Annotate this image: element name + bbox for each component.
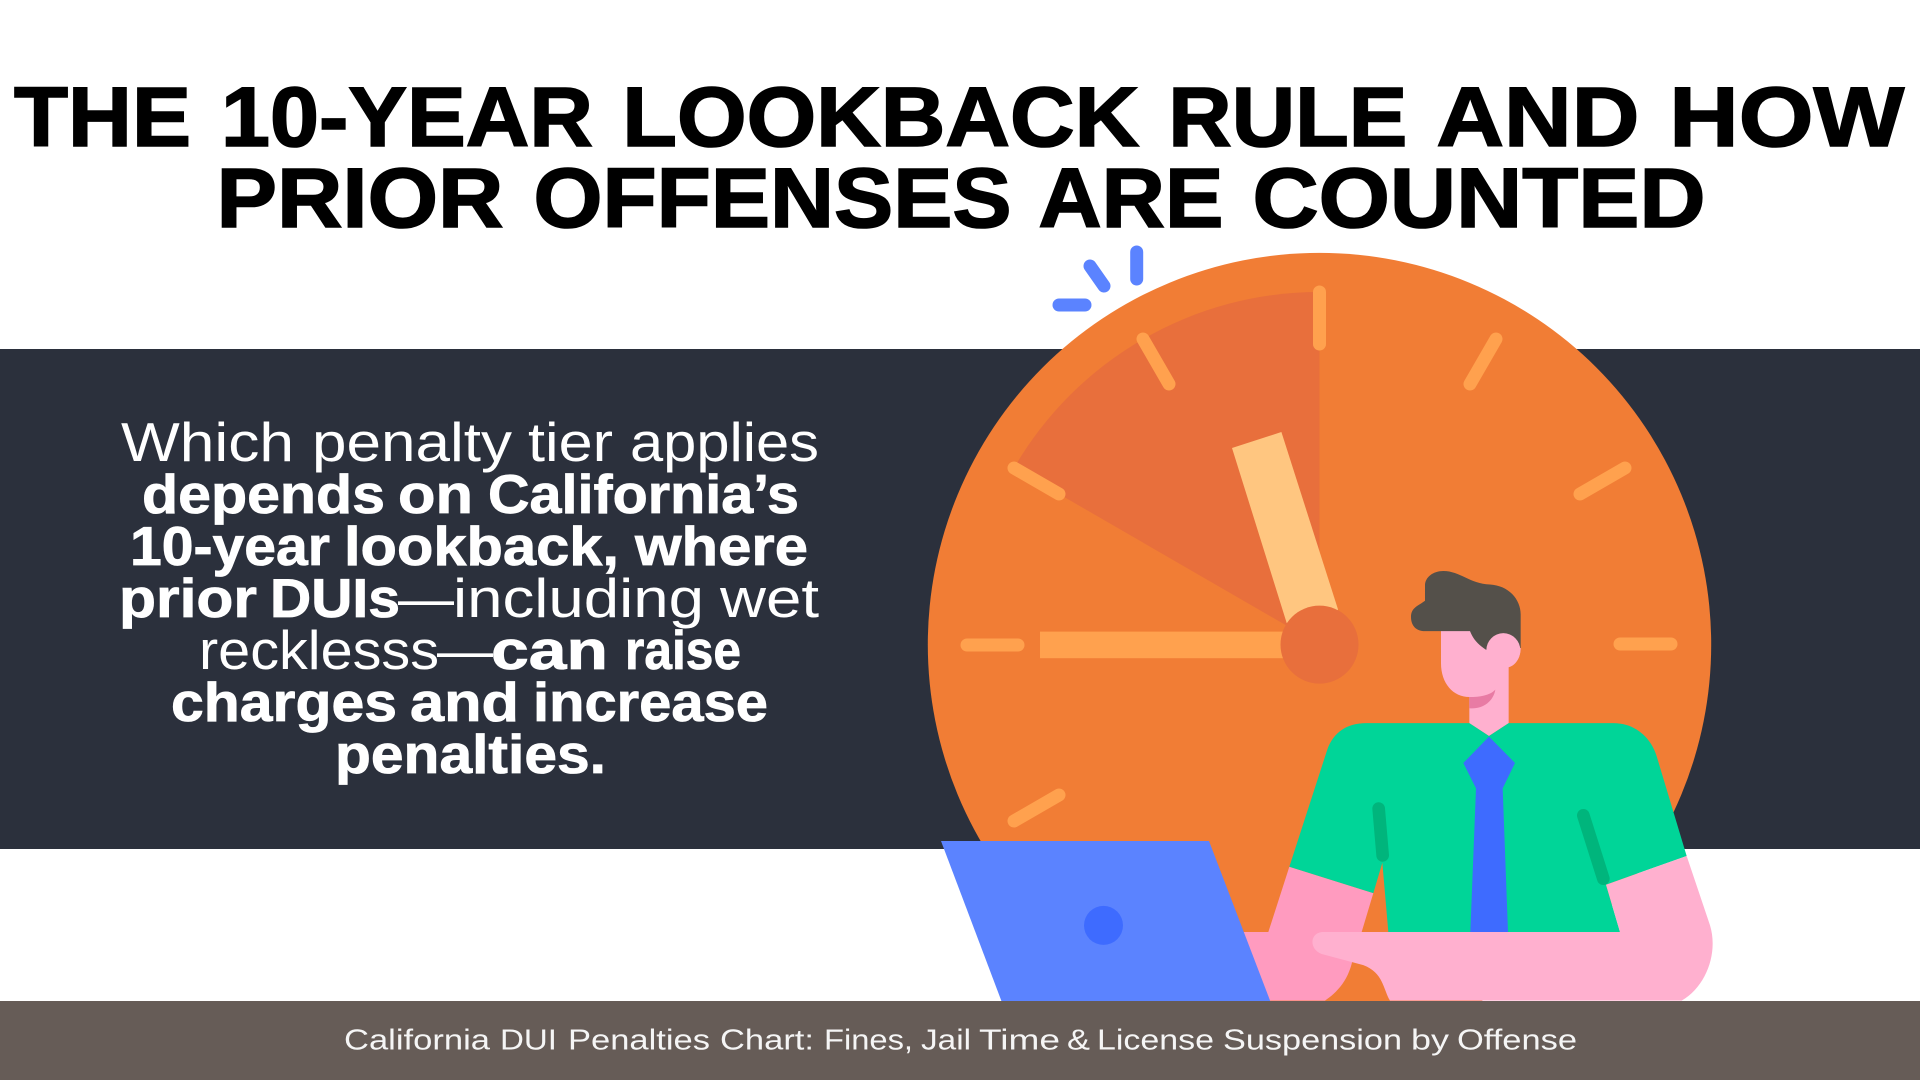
smile shadow — [1469, 690, 1495, 708]
title — [14, 70, 1905, 245]
footer caption — [344, 1024, 1577, 1056]
title: AND — [1436, 70, 1639, 164]
text block: lookback explanation: 10-year — [130, 515, 330, 577]
text block: lookback explanation: Which — [121, 411, 294, 473]
text block: lookback explanation: raise — [625, 619, 741, 681]
text block: lookback explanation: California’s — [488, 463, 799, 525]
text block: lookback explanation: penalties. — [335, 723, 606, 785]
footer caption: Offense — [1457, 1024, 1577, 1056]
text block: lookback explanation: recklesss — [199, 619, 439, 681]
text block: lookback explanation: charges — [171, 671, 397, 733]
text block: lookback explanation: — — [398, 567, 454, 629]
footer caption: Penalties — [568, 1024, 710, 1056]
shirt — [1289, 723, 1687, 932]
title: HOW — [1669, 70, 1905, 164]
footer caption: California — [344, 1024, 491, 1056]
text block: lookback explanation: tier — [528, 411, 613, 473]
text block: lookback explanation: depends — [142, 463, 385, 525]
text block: lookback explanation: prior — [119, 567, 257, 629]
clock tick marks — [967, 292, 1671, 821]
footer caption: License — [1097, 1024, 1214, 1056]
footer bar — [0, 1001, 1920, 1080]
text block: lookback explanation: including — [453, 567, 704, 629]
title: OFFENSES — [534, 151, 1012, 245]
text block: lookback explanation: DUIs — [270, 567, 400, 629]
footer caption: & — [1067, 1024, 1090, 1056]
footer caption: DUI — [500, 1024, 557, 1056]
footer caption: by — [1411, 1024, 1450, 1056]
tie — [1463, 737, 1515, 932]
text block: lookback explanation: applies — [630, 411, 819, 473]
title: LOOKBACK — [622, 70, 1139, 164]
footer caption: Suspension — [1223, 1024, 1402, 1056]
clock face — [928, 253, 1711, 1036]
footer caption: Fines, — [824, 1024, 913, 1056]
title: PRIOR — [216, 151, 504, 245]
title: COUNTED — [1252, 151, 1706, 245]
text block: lookback explanation: — — [437, 619, 493, 681]
left arm — [1237, 867, 1373, 1001]
right arm — [1312, 856, 1713, 1001]
text block: lookback explanation: and — [410, 671, 519, 733]
footer caption: Time — [979, 1024, 1060, 1056]
person at laptop — [1237, 571, 1713, 1001]
hour hand — [1232, 432, 1338, 650]
neck and face — [1441, 628, 1521, 736]
title: ARE — [1038, 151, 1223, 245]
text block: lookback explanation: penalty — [312, 411, 513, 473]
shirt creases — [1379, 809, 1603, 879]
title: 10-YEAR — [221, 70, 593, 164]
text block: lookback explanation: where — [634, 515, 808, 577]
footer caption: Chart: — [720, 1024, 814, 1056]
minute hand — [1040, 632, 1320, 658]
text block: lookback explanation: on — [398, 463, 473, 525]
dark band panel — [0, 349, 1920, 849]
footer caption: Jail — [921, 1024, 971, 1056]
text block: lookback explanation: can — [491, 619, 608, 681]
text block: lookback explanation: wet — [719, 567, 819, 629]
title: THE — [14, 70, 191, 164]
ear — [1486, 633, 1520, 668]
text block: lookback explanation — [119, 411, 819, 785]
clock — [928, 253, 1711, 1036]
laptop — [941, 841, 1271, 1002]
title: RULE — [1168, 70, 1407, 164]
clock hub — [1280, 606, 1358, 684]
hair — [1411, 571, 1521, 650]
icon: alarm sparks — [1059, 252, 1137, 305]
highlighted lookback sector — [1014, 292, 1320, 645]
text block: lookback explanation: increase — [533, 671, 768, 733]
text block: lookback explanation: lookback, — [344, 515, 619, 577]
